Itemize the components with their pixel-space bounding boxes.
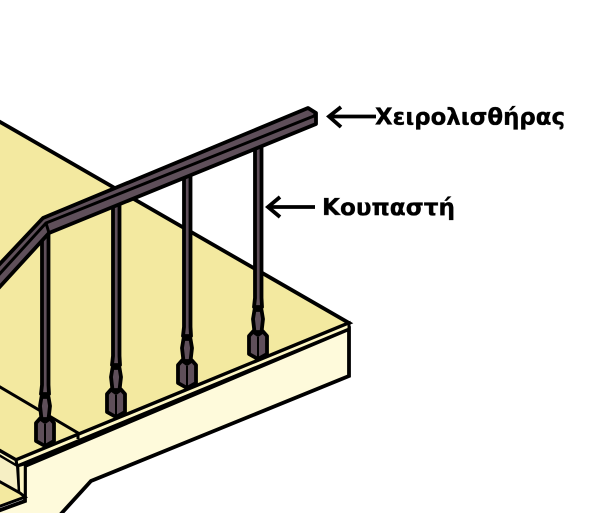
handrail [0, 108, 316, 292]
label: handrail: Χειρολισθήρας [375, 104, 565, 130]
baluster 2 [178, 175, 196, 388]
nosing strip [16, 323, 349, 466]
baluster 3 [107, 204, 125, 417]
side face [0, 329, 349, 513]
lower step edge [0, 384, 78, 439]
landing top surface [0, 119, 349, 460]
riser side strip [18, 464, 25, 497]
lower riser [0, 453, 19, 495]
baluster 1 [249, 146, 267, 359]
label: baluster: Κουπαστή [322, 195, 455, 221]
staircase body [0, 119, 349, 513]
step nosing [0, 448, 17, 466]
arrow: handrail [329, 107, 376, 127]
arrow: baluster [268, 197, 315, 217]
lower tread [0, 479, 25, 508]
baluster 4 [36, 233, 54, 446]
